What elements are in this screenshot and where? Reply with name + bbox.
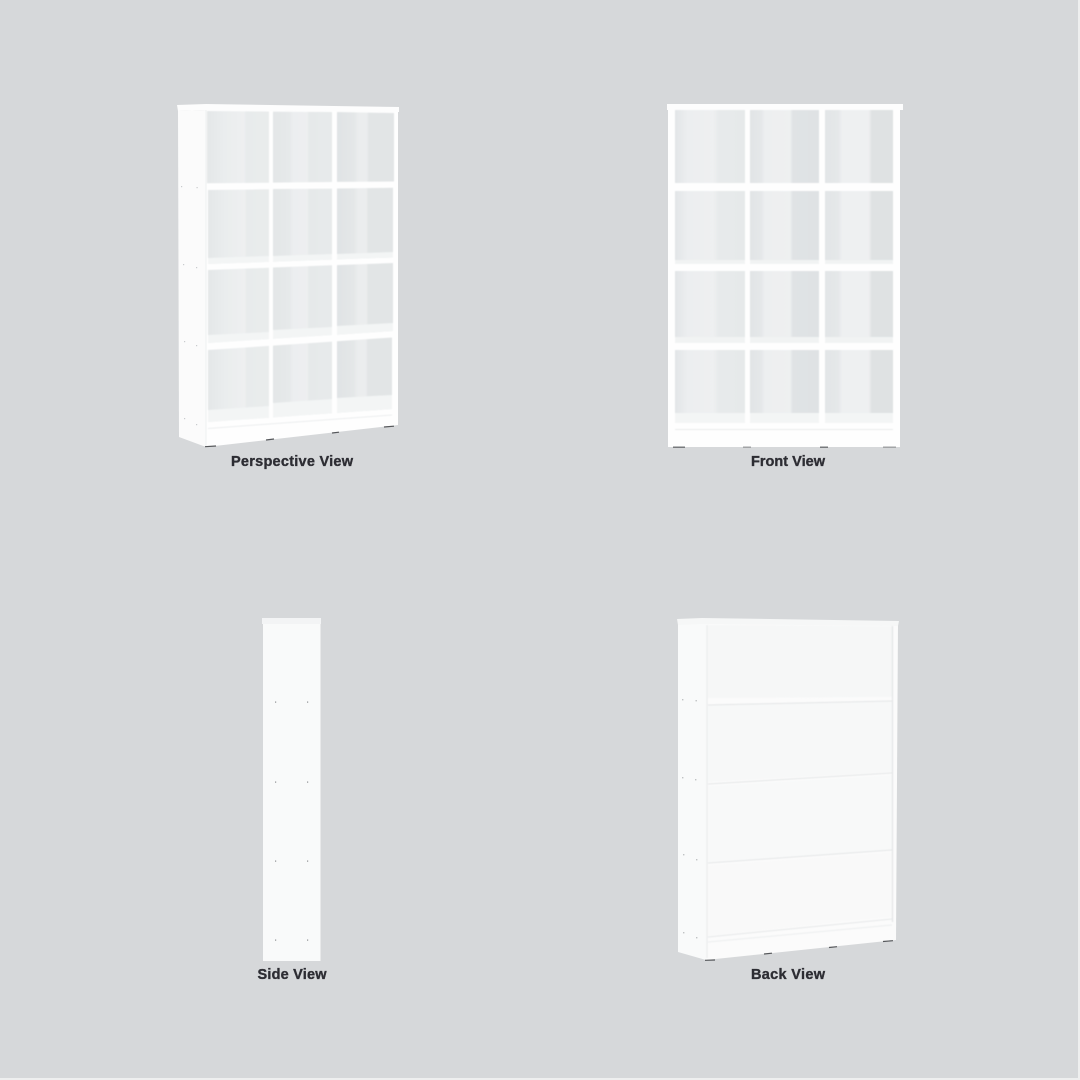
screw holes: side [275, 702, 308, 941]
shelf carcass: back [677, 618, 899, 960]
feet: back [705, 941, 893, 960]
feet: perspective [205, 426, 394, 447]
label: front view: Front View [751, 454, 826, 470]
back panels [707, 625, 892, 958]
side board [262, 618, 321, 961]
cubbies: perspective [207, 111, 394, 428]
label: perspective view: Perspective View [231, 454, 354, 470]
panel: back view [677, 618, 899, 983]
cubbies: front [675, 110, 893, 430]
panel: front view [667, 104, 903, 470]
screw holes: perspective [181, 186, 198, 425]
screw holes: back [682, 699, 697, 938]
label: back view: Back View [751, 967, 826, 983]
label: side view: Side View [258, 967, 327, 983]
shelf carcass: front [667, 104, 903, 447]
panel: side view [258, 618, 327, 983]
feet: front [673, 446, 896, 448]
panel: perspective view [177, 104, 399, 470]
shelf carcass: perspective [177, 104, 399, 447]
